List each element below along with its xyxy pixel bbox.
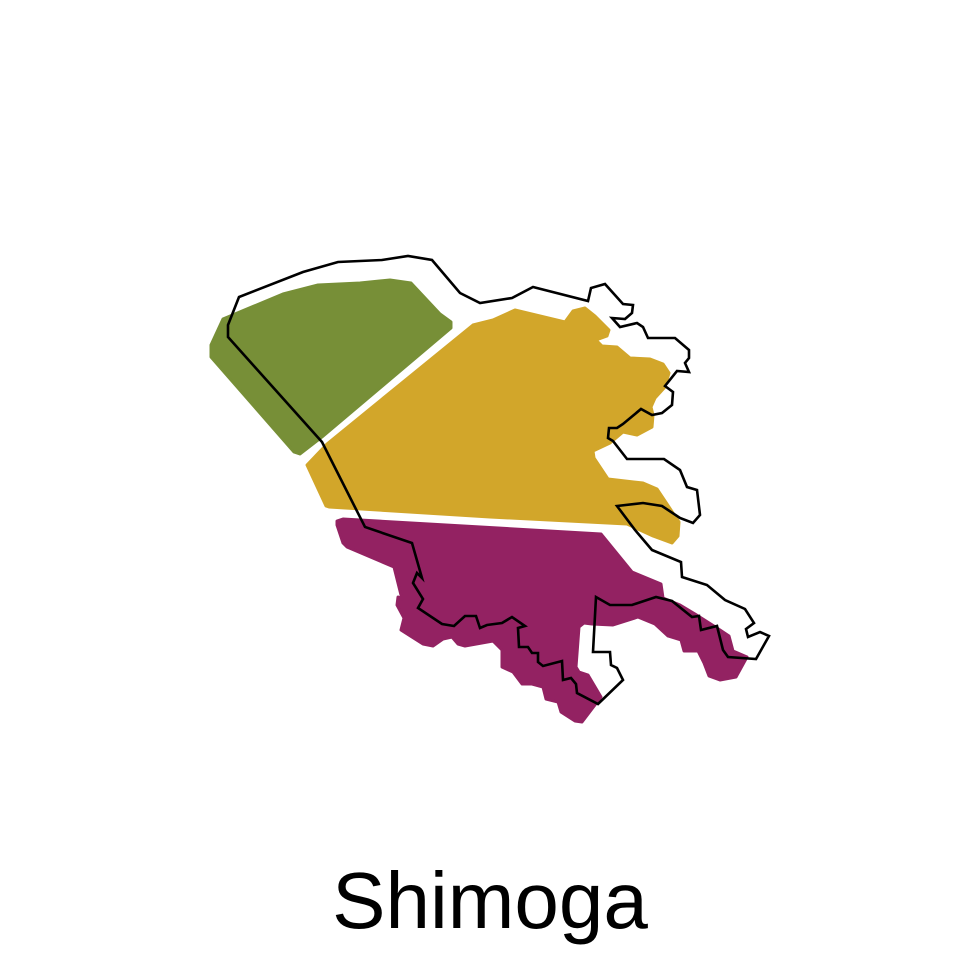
title: Shimoga bbox=[332, 856, 648, 945]
outline: black border bbox=[228, 256, 769, 704]
region: yellow central bbox=[307, 308, 679, 543]
region: green north-west bbox=[211, 280, 451, 454]
region: magenta south bbox=[337, 519, 747, 722]
map of Shimoga bbox=[211, 256, 769, 722]
